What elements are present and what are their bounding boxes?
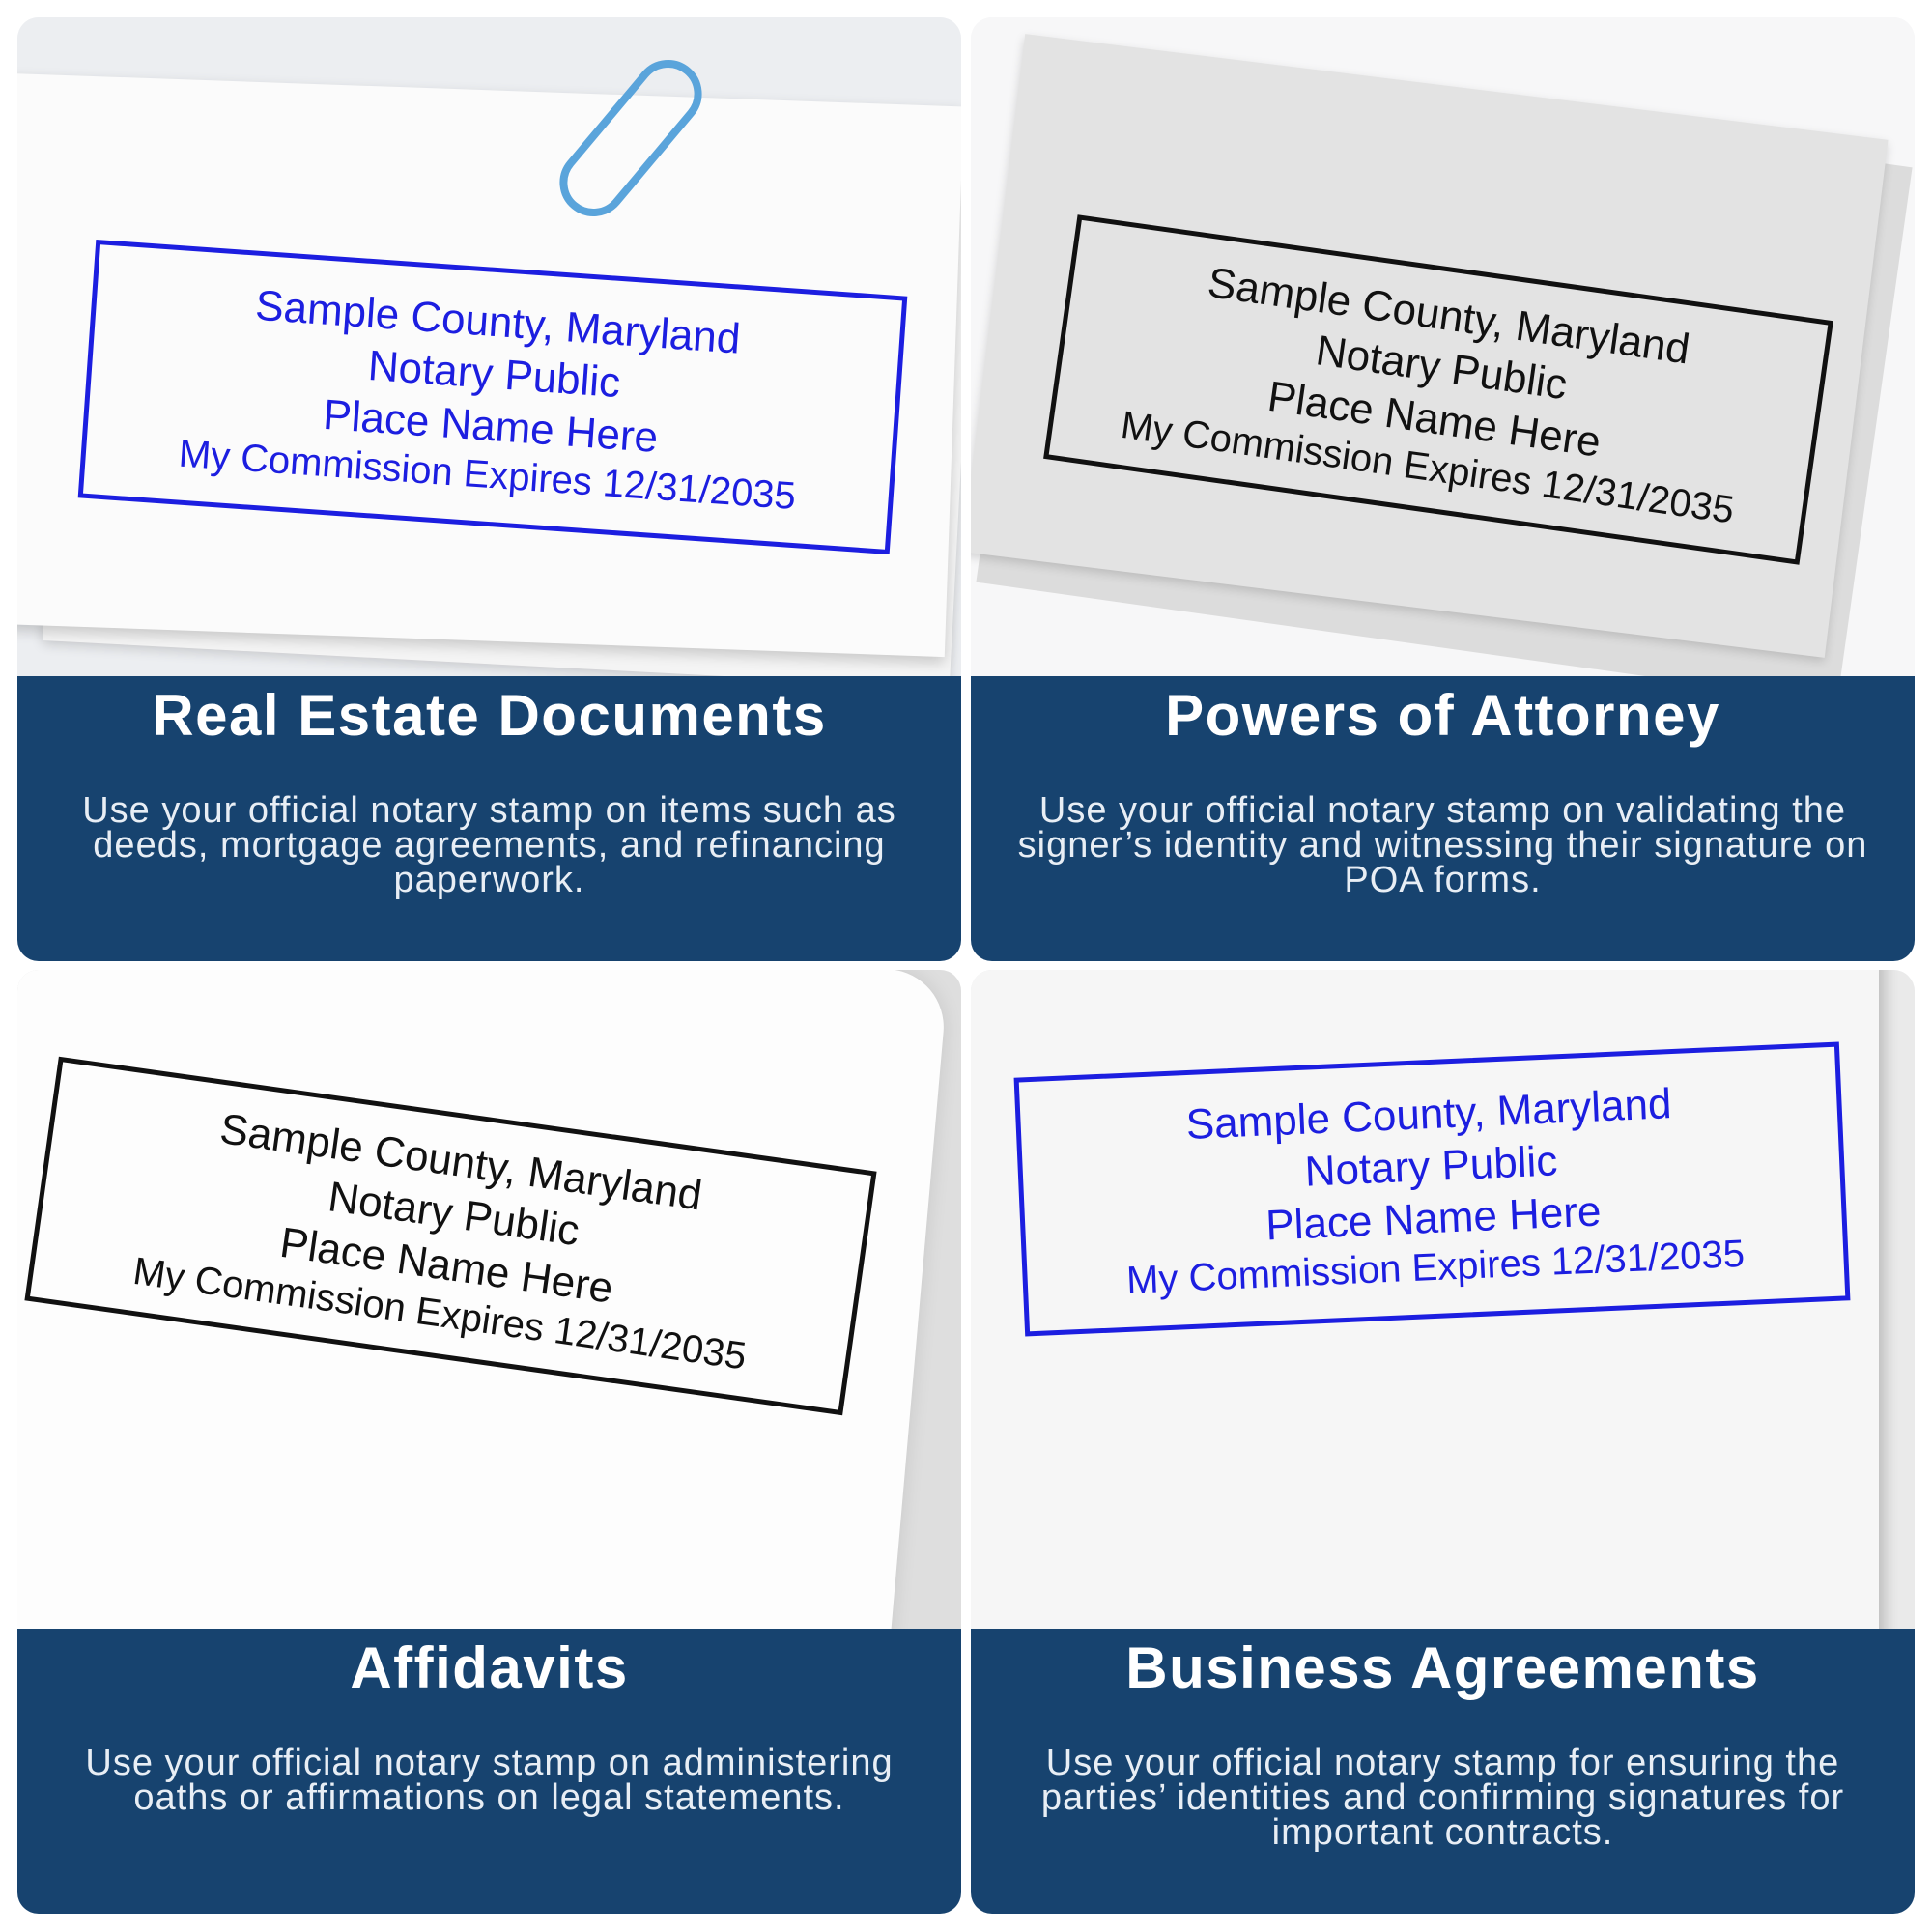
photo: blue stamp on paper stack [17,17,961,676]
caption band [17,676,961,961]
caption band: Use your official notary stamp on items such as deeds, mortgage agreements, and refinancing paperwork. [82,790,896,900]
stamp impression: Notary Public [1304,1137,1558,1196]
caption band: Real Estate Documents [152,683,827,748]
photo: black stamp on textured paper [971,17,1915,676]
stamp impression: Place Name Here [277,1218,616,1312]
caption band [17,1629,961,1914]
stamp impression: Sample County, Maryland [1185,1080,1672,1149]
caption band: Affidavits [350,1635,629,1700]
caption band [971,1629,1915,1914]
stamp impression: My Commission Expires 12/31/2035 [177,433,797,518]
caption band: Powers of Attorney [1165,683,1720,748]
icon: paper clip [546,46,716,230]
stamp impression: Place Name Here [1264,372,1604,466]
stamp impression [24,1057,877,1415]
stamp impression: My Commission Expires 12/31/2035 [130,1249,749,1378]
panel: real estate documents [17,17,961,961]
panel: affidavits [17,970,961,1914]
stamp impression: My Commission Expires 12/31/2035 [1125,1233,1746,1302]
photo: black stamp on white sheet [17,970,961,1629]
stamp impression [78,240,907,554]
stamp impression: Notary Public [1313,327,1570,409]
stamp impression: Sample County, Maryland [217,1104,705,1219]
stamp impression: Sample County, Maryland [254,282,742,363]
panel: business agreements [971,970,1915,1914]
stamp impression: Place Name Here [1264,1187,1602,1250]
stamp impression: Notary Public [366,342,622,407]
stamp impression: Place Name Here [322,391,660,462]
caption band: Use your official notary stamp for ensuring the parties’ identities and confirming signatures for important contracts. [1041,1743,1844,1853]
stamp impression [1014,1041,1850,1337]
stamp impression: My Commission Expires 12/31/2035 [1119,403,1737,531]
panel: powers of attorney [971,17,1915,961]
photo: blue stamp on paper [971,970,1915,1629]
caption band [971,676,1915,961]
stamp impression [1043,214,1833,565]
caption band: Use your official notary stamp on administering oaths or affirmations on legal statements. [85,1743,894,1818]
caption band: Business Agreements [1125,1635,1760,1700]
stamp impression: Sample County, Maryland [1205,258,1692,373]
stamp impression: Notary Public [326,1173,582,1255]
caption band: Use your official notary stamp on validating the signer’s identity and witnessing their signature on POA forms. [1018,790,1867,900]
